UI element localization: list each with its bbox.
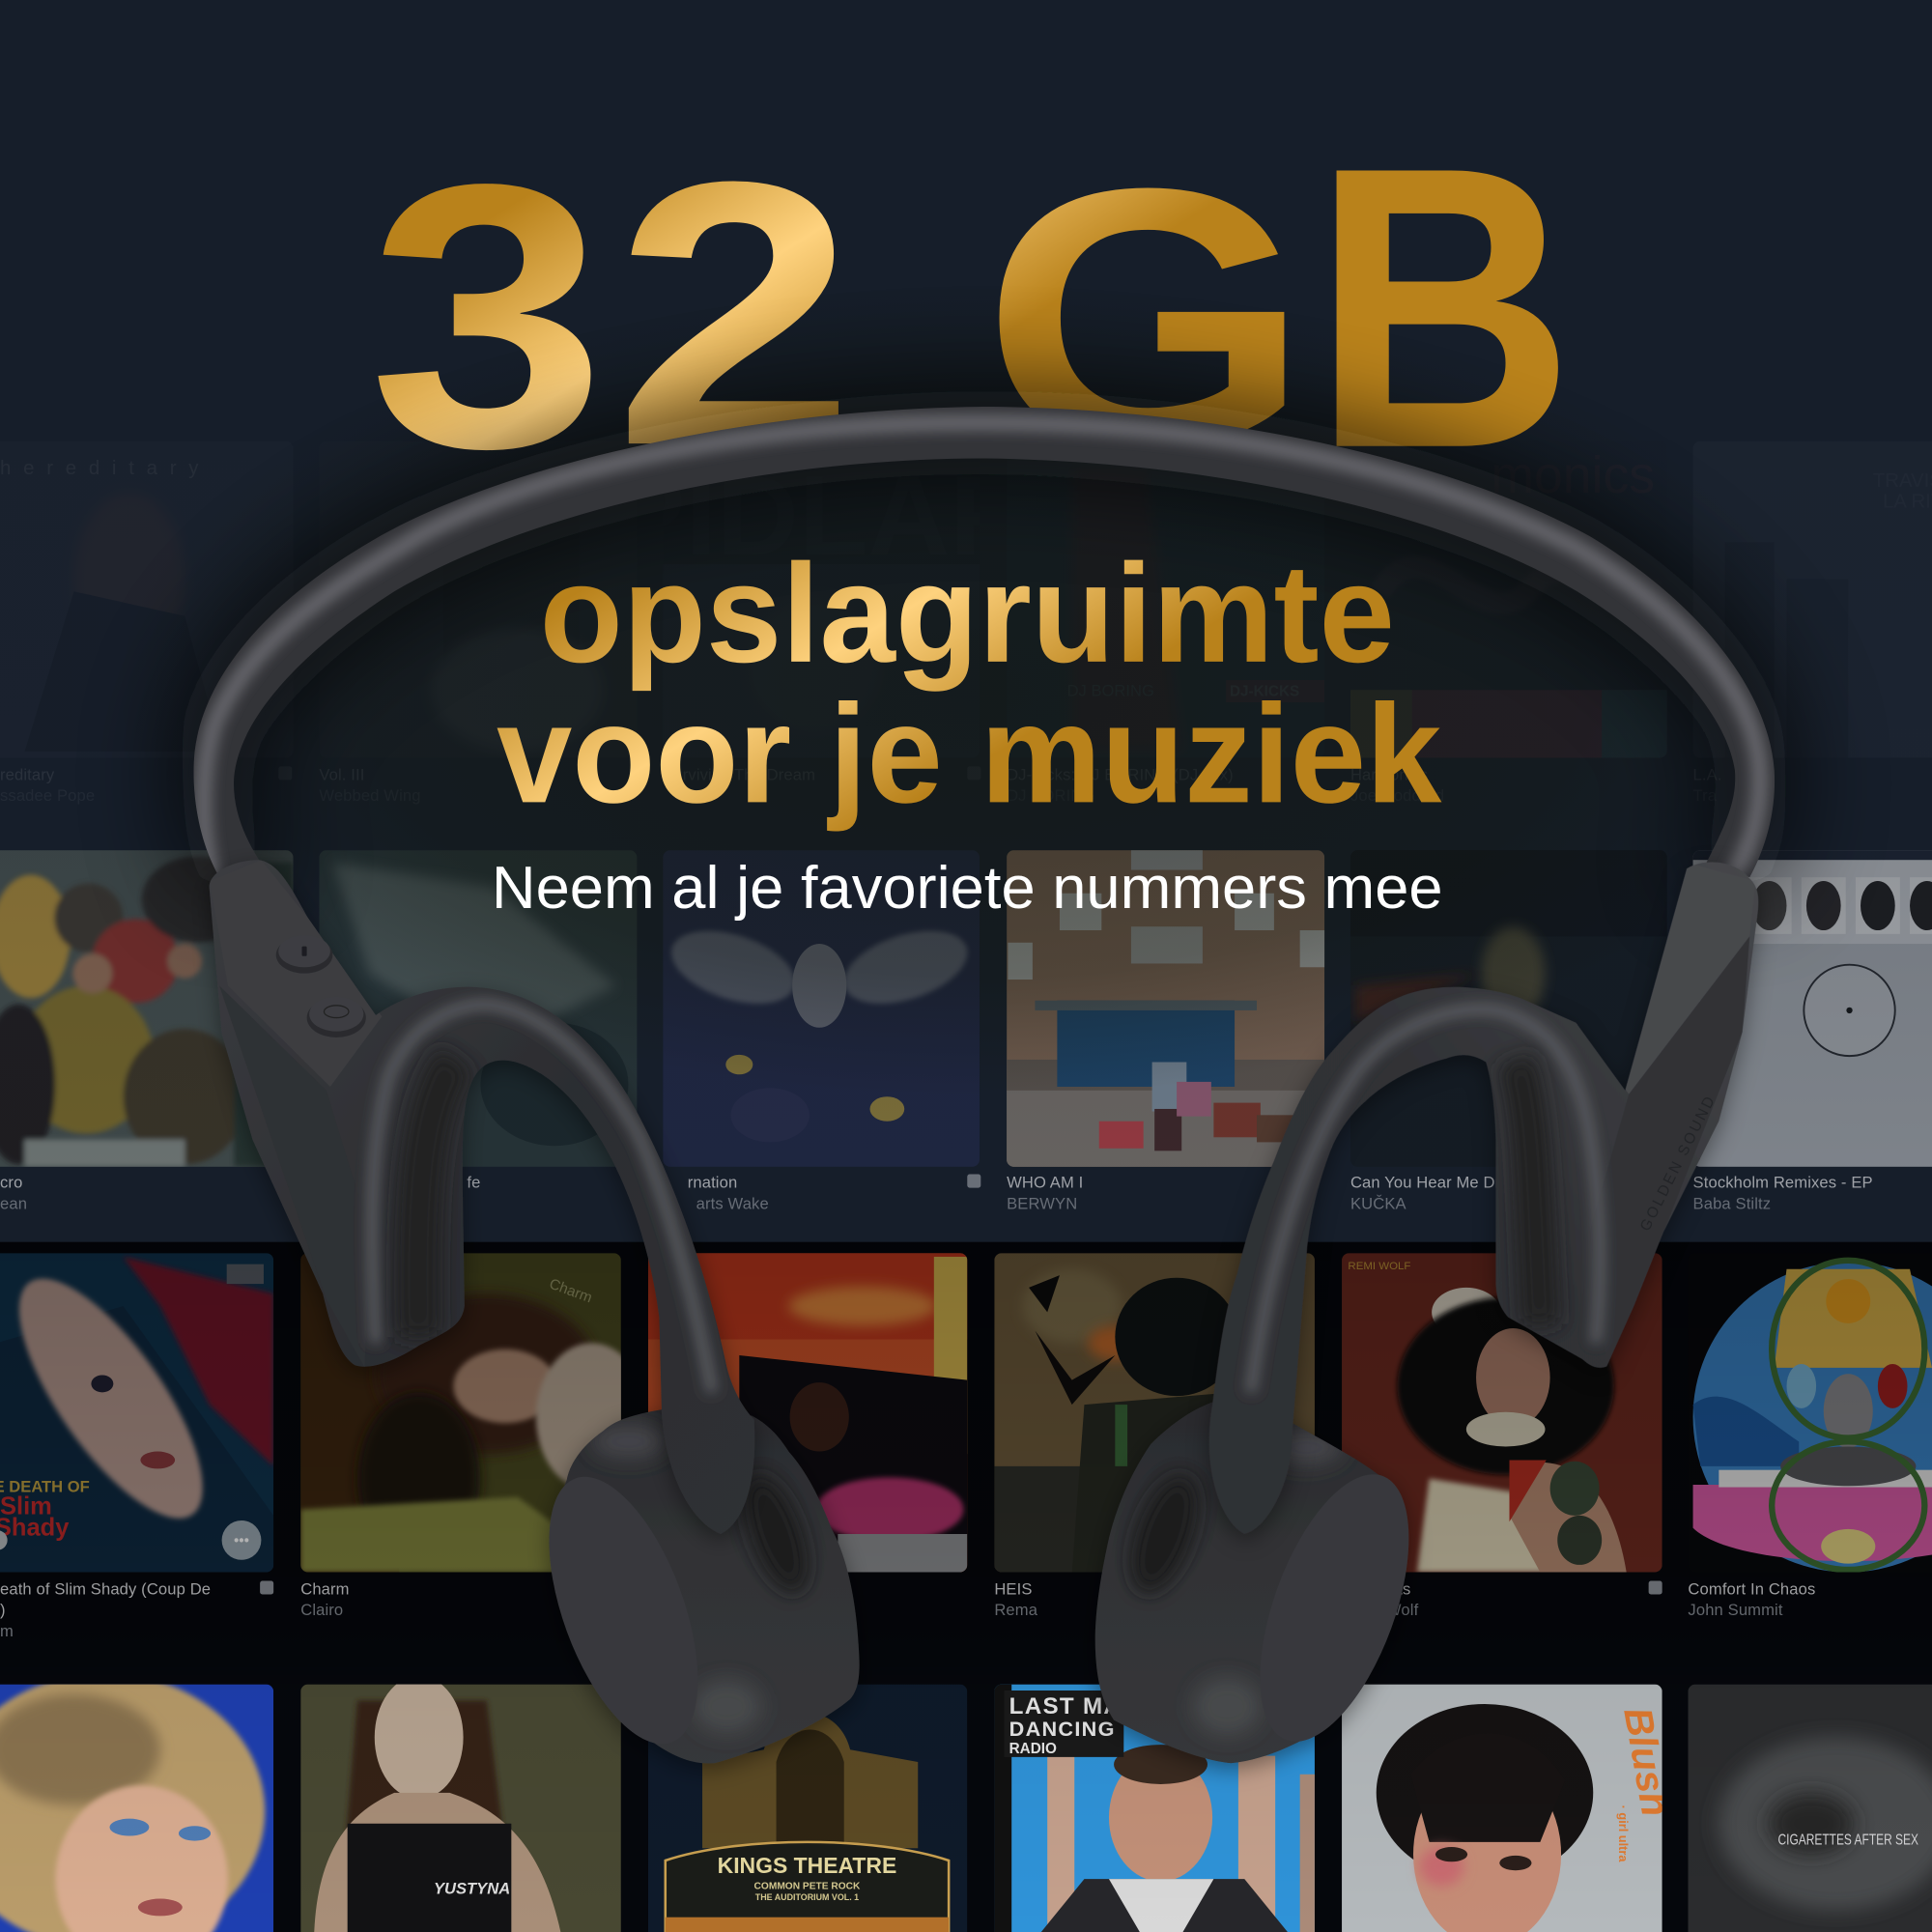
right ear pod: [1095, 1403, 1439, 1763]
row 3 captions: Comfort In Chaos: [1688, 1580, 1815, 1599]
headline: 32 GB: [368, 84, 1575, 531]
album: Death of Slim Shady: [0, 1253, 273, 1573]
dark overlay on lower albums: [0, 1242, 1932, 1932]
tagline: Neem al je favoriete nummers mee: [492, 854, 1443, 922]
album: Kings Theatre: COMMON PETE ROCK: [754, 1881, 861, 1891]
right ear hook and module: [1209, 862, 1758, 1534]
row 3 captions: Rema: [994, 1601, 1038, 1619]
row 1 captions: L.A.: [1693, 765, 1722, 783]
left pod face: [519, 1458, 728, 1763]
album: DJ-Kicks: DJ BORING: [1067, 682, 1154, 700]
row 1 captions: reditary: [0, 765, 55, 783]
album: Cigarettes After Sex: [1688, 1685, 1932, 1932]
row 3 captions: John Summit: [1688, 1601, 1783, 1619]
row 3 captions: ): [0, 1601, 6, 1619]
row 1 captions: [0, 765, 1722, 805]
headband: [173, 394, 1799, 887]
brand text on module: GOLDEN SOUND: [1637, 1094, 1719, 1234]
album: Last Man Dancing Radio: [994, 1685, 1315, 1932]
subheading: opslagruimte voor je muziek: opslagruimte: [540, 534, 1395, 692]
row 3 captions: Clairo: [300, 1601, 343, 1619]
album: HEIS: [994, 1253, 1315, 1573]
headline: 32 GB: 3: [368, 107, 606, 526]
album: teal still life: [319, 850, 637, 1167]
right pod face: [1230, 1456, 1439, 1761]
album: Can You Hear Me Dream: [1350, 850, 1667, 1167]
album: Surviving The Dream: [610, 441, 1032, 757]
album: Harmonics: [1350, 690, 1642, 757]
row 3 captions: [0, 1580, 1815, 1640]
album: WHO AM I: [1007, 850, 1324, 1167]
row 2 captions: [0, 1174, 1873, 1212]
album: Hereditary: hereditary: [0, 458, 211, 479]
album: Hereditary: [2, 460, 199, 614]
album: Travis LA: [1874, 473, 1932, 508]
row 1 captions: DJ-Kicks: DJ BORING (DJ Mix): [1007, 765, 1234, 783]
row 2 captions: KUČKA: [1350, 1194, 1407, 1212]
row 1 captions: Webbed Wing: [319, 786, 421, 805]
row 2 captions: fe: [467, 1174, 481, 1192]
album: blonde portrait: [0, 1673, 273, 1932]
album: Death of Slim Shady: Slim: [0, 1493, 52, 1520]
album: Charm: Charm: [547, 1276, 594, 1306]
album: Kings Theatre: [648, 1685, 967, 1932]
central warm tint behind text: [111, 283, 1836, 1096]
album: DJ-Kicks: DJ-KICKS: [1230, 684, 1299, 700]
row 3 captions: eath of Slim Shady (Coup De: [0, 1580, 211, 1599]
row 2 captions: rnation: [688, 1174, 737, 1192]
page background: [0, 0, 1932, 1242]
album: Blush: Blush: [1615, 1704, 1678, 1820]
row 1 captions: DJ BORING: [1007, 786, 1095, 805]
row 1 captions: ssadee Pope: [0, 786, 95, 805]
explicit badges: [260, 766, 1662, 1595]
album: Yustyna: [300, 1676, 621, 1932]
row 1 captions: Harmonics: [1350, 765, 1428, 783]
row 2 captions: Baba Stiltz: [1693, 1194, 1771, 1212]
headline: 32 GB: B: [1312, 84, 1575, 531]
subheading: opslagruimte voor je muziek: [497, 534, 1441, 832]
row 2 captions: ean: [0, 1194, 27, 1212]
row 2 captions: arts Wake: [696, 1194, 769, 1212]
album: Stockholm Remixes: [1693, 850, 1932, 1167]
headphones: [173, 394, 1799, 1763]
album: owl artwork: [663, 850, 980, 1167]
album: Harmonics: monics: [1491, 447, 1655, 504]
headband shadow: [193, 407, 1775, 877]
headline: 32 GB: G: [982, 112, 1310, 526]
left ear hook and control module: [210, 860, 754, 1534]
button: upper: [276, 935, 332, 974]
left ear pod: [519, 1409, 860, 1763]
album: Death of Slim Shady: •••: [234, 1532, 249, 1548]
album: Kings Theatre: THE AUDITORIUM VOL. 1: [755, 1892, 859, 1902]
album: Remi Wolf: REMI WOLF: [1348, 1261, 1410, 1272]
album: Blush: · girl ultra: [1616, 1805, 1631, 1862]
album: Charm: [300, 1253, 647, 1573]
album: Last Man Dancing Radio: LAST MAN: [1009, 1693, 1140, 1719]
album: Last Man Dancing Radio: DANCING: [1009, 1717, 1116, 1741]
album: Last Man Dancing Radio: RADIO: [1009, 1741, 1057, 1757]
album grid: [0, 441, 1932, 1932]
row 3 captions: Charm: [300, 1580, 350, 1599]
lower dark background: [0, 1242, 1932, 1932]
row 3 captions: HEIS: [994, 1580, 1033, 1599]
album: Surviving The Dream: PIDLAR: [610, 452, 1032, 579]
album: Comfort In Chaos: [1688, 1253, 1932, 1573]
row 2 captions: BERWYN: [1007, 1194, 1077, 1212]
album: DJ-Kicks: [1111, 681, 1324, 702]
row 1 captions: Tra: [1693, 786, 1718, 805]
row 3 captions: as: [1394, 1580, 1410, 1599]
row 1 captions: Surviving The Dream: [663, 765, 815, 783]
row 2 captions: cro: [0, 1174, 22, 1192]
row 2 captions: Stockholm Remixes - EP: [1693, 1174, 1873, 1192]
row 2 captions: WHO AM I: [1007, 1174, 1083, 1192]
album: Blush: [1342, 1685, 1678, 1932]
album: Yustyna: YUSTYNA: [434, 1879, 510, 1897]
dark navy fade overlay on upper albums: [0, 0, 1932, 1242]
row 3 captions: Wolf: [1386, 1601, 1419, 1619]
album: Remi Wolf: [1342, 1253, 1662, 1573]
album: Kings Theatre: KINGS THEATRE: [718, 1853, 896, 1878]
row 2 captions: Can You Hear Me Dream: [1350, 1174, 1532, 1192]
album: red sky car cover: [648, 1253, 967, 1573]
button: lower: [307, 997, 366, 1037]
row 3 captions: m: [0, 1622, 14, 1640]
row 1 captions: Vol. III: [319, 765, 364, 783]
album: cro group portrait: [0, 850, 294, 1167]
subheading: opslagruimte voor je muziek: voor je muziek: [497, 674, 1441, 832]
album: Vol. III: [444, 642, 510, 738]
headline: 32 GB: 2: [613, 104, 856, 524]
row 1 captions: Joe Goddard: [1350, 786, 1444, 805]
